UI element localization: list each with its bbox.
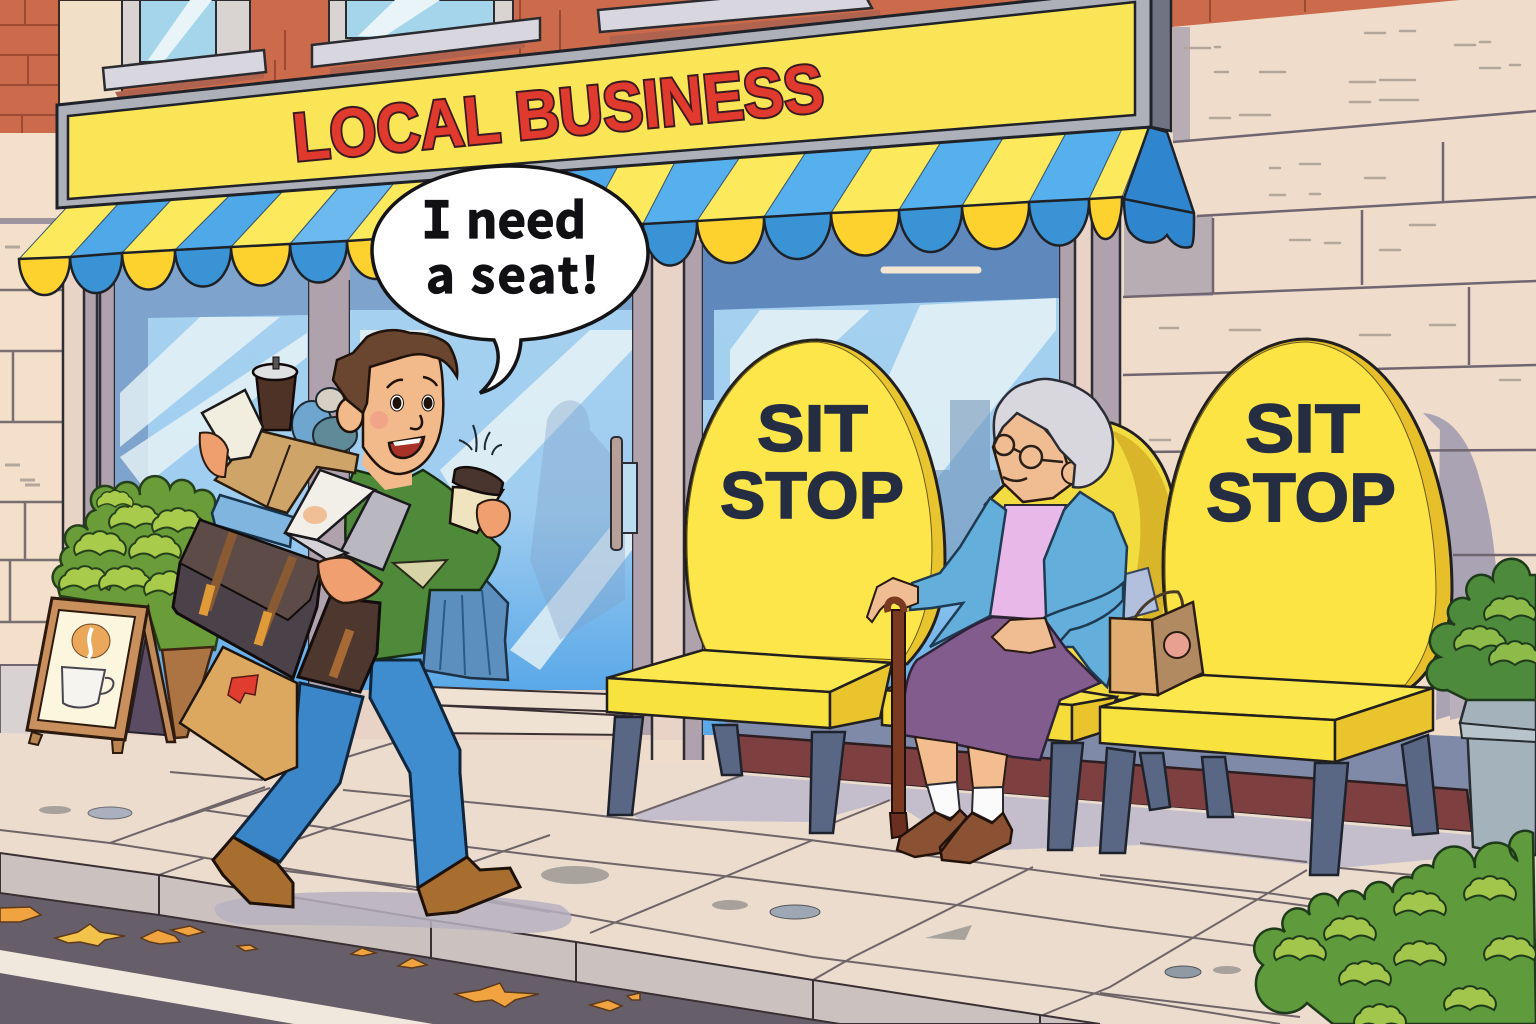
shopping bag [1110, 592, 1203, 695]
hair [994, 379, 1113, 488]
blue tote bag [423, 577, 508, 680]
left stone wall [0, 133, 63, 735]
chair legs [1100, 735, 1438, 875]
small satchel [298, 597, 380, 692]
hand on briefcase [318, 557, 382, 603]
right potted plant [1427, 559, 1536, 855]
chair legs [608, 717, 845, 833]
chair seat [607, 650, 892, 728]
front right chair [1100, 339, 1452, 875]
rear leg [233, 683, 363, 862]
red tag [228, 675, 258, 703]
neck [362, 445, 412, 490]
shoes [897, 810, 1012, 863]
eyebrows and nose [387, 377, 437, 429]
grease spots [303, 506, 327, 524]
back left chair [607, 340, 945, 833]
plant pot [162, 647, 213, 738]
bubble text line 1: need [466, 182, 586, 253]
bottom right shrub [1254, 831, 1536, 1024]
chair back with SIT STOP: SIT [1245, 390, 1360, 467]
coffee cup in hand [450, 425, 510, 538]
front leg [370, 660, 467, 888]
bubble text line 1: I [421, 191, 452, 251]
white paper bag [285, 470, 410, 570]
ear [1062, 462, 1084, 484]
chair seat [1100, 675, 1433, 762]
leather briefcase [173, 520, 322, 678]
sign text: LOCAL BUSINESS: LOCAL BUSINESS [289, 50, 827, 176]
curb and road [0, 853, 1100, 1024]
tall drink cup [253, 357, 297, 430]
chair back with SIT STOP: STOP [1206, 459, 1396, 536]
storefront frames [63, 200, 1122, 760]
cuff cloth [393, 560, 447, 588]
cardboard box [215, 430, 358, 513]
mixed items in box [292, 388, 357, 453]
elderly woman [867, 379, 1158, 863]
upper floor windows [103, 0, 880, 98]
chair back with SIT STOP: STOP [720, 458, 904, 532]
right stone wall [1120, 0, 1536, 860]
blue roll [212, 495, 293, 547]
speech bubble [372, 166, 648, 393]
cardigan [910, 492, 1127, 687]
neck and top [990, 505, 1066, 620]
middle chair behind woman [882, 423, 1175, 850]
head [993, 413, 1073, 502]
door handle [611, 437, 637, 550]
mouth [389, 437, 424, 458]
sidewalk [0, 733, 1536, 1024]
cane [890, 610, 908, 838]
awning scalloped valance [19, 127, 1194, 295]
hair [333, 330, 457, 413]
eyes [390, 395, 404, 411]
front boot [418, 857, 520, 915]
skirt [903, 617, 1100, 760]
head [333, 330, 457, 474]
wall base [703, 700, 1536, 832]
glasses and face details [994, 435, 1063, 481]
striped awning canopy [19, 127, 1149, 259]
blue cushion [1122, 568, 1158, 620]
shop windows [115, 215, 1059, 735]
left shrub [53, 476, 225, 650]
legs [915, 737, 1007, 788]
rear boot [213, 837, 293, 907]
bubble text line 2: a seat! [426, 237, 599, 308]
chair back with SIT STOP: SIT [757, 391, 868, 465]
cheek [370, 411, 388, 429]
man carrying packages [173, 330, 520, 915]
hands [867, 578, 1055, 653]
green jacket [345, 470, 500, 660]
socks [927, 782, 1003, 822]
chair back with SIT STOP [685, 340, 945, 664]
kraft shopping bag [180, 647, 297, 780]
glass in hand [200, 390, 263, 477]
sandwich board [27, 598, 175, 753]
cane handle [887, 600, 904, 612]
shop sign board [57, 0, 1171, 208]
chair back with SIT STOP [1163, 339, 1452, 688]
